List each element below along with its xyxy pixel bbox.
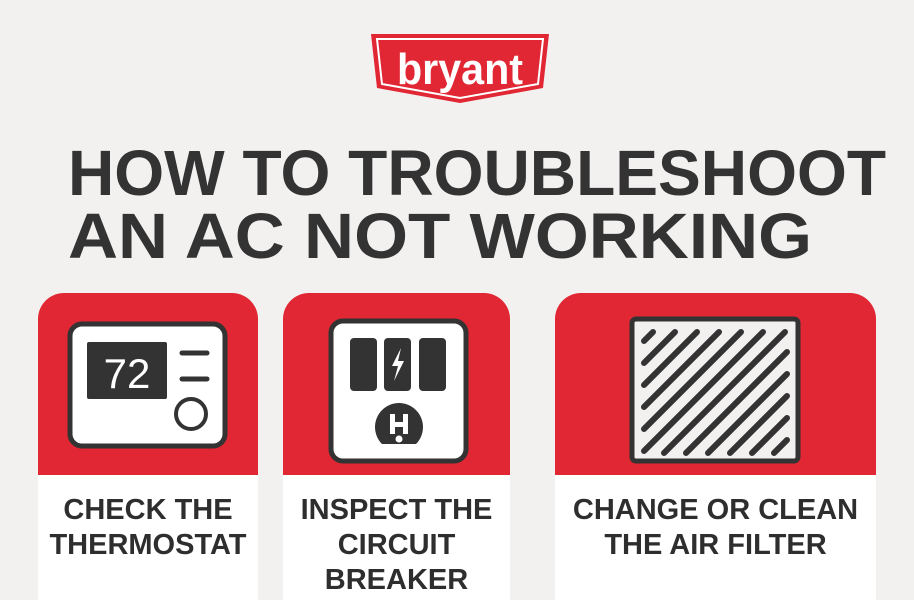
title: HOW TO TROUBLESHOOT — [68, 137, 886, 209]
label: inspect the circuit breaker: INSPECT THE — [301, 494, 492, 526]
panel: circuit breaker — [283, 293, 510, 600]
label: inspect the circuit breaker: CIRCUIT — [338, 529, 455, 561]
panel: thermostat — [38, 293, 258, 600]
icon: circuit breaker — [328, 318, 468, 464]
label: change or clean the air filter: THE AIR FILTER — [604, 529, 827, 561]
logo: bryant: bryant — [397, 45, 523, 94]
label: check the thermostat: CHECK THE — [63, 494, 233, 526]
title — [68, 137, 886, 270]
logo: bryant — [371, 34, 549, 103]
label: check the thermostat — [49, 494, 247, 561]
title: AN AC NOT WORKING — [68, 200, 812, 270]
icon: thermostat — [68, 322, 228, 448]
label: change or clean the air filter — [573, 494, 858, 561]
panel: air filter — [555, 293, 876, 600]
icon: thermostat: 72 — [104, 350, 150, 397]
label: inspect the circuit breaker — [301, 494, 492, 596]
label: change or clean the air filter: CHANGE OR CLEAN — [573, 494, 858, 526]
label: inspect the circuit breaker: BREAKER — [325, 564, 468, 596]
label: check the thermostat: THERMOSTAT — [49, 529, 247, 561]
